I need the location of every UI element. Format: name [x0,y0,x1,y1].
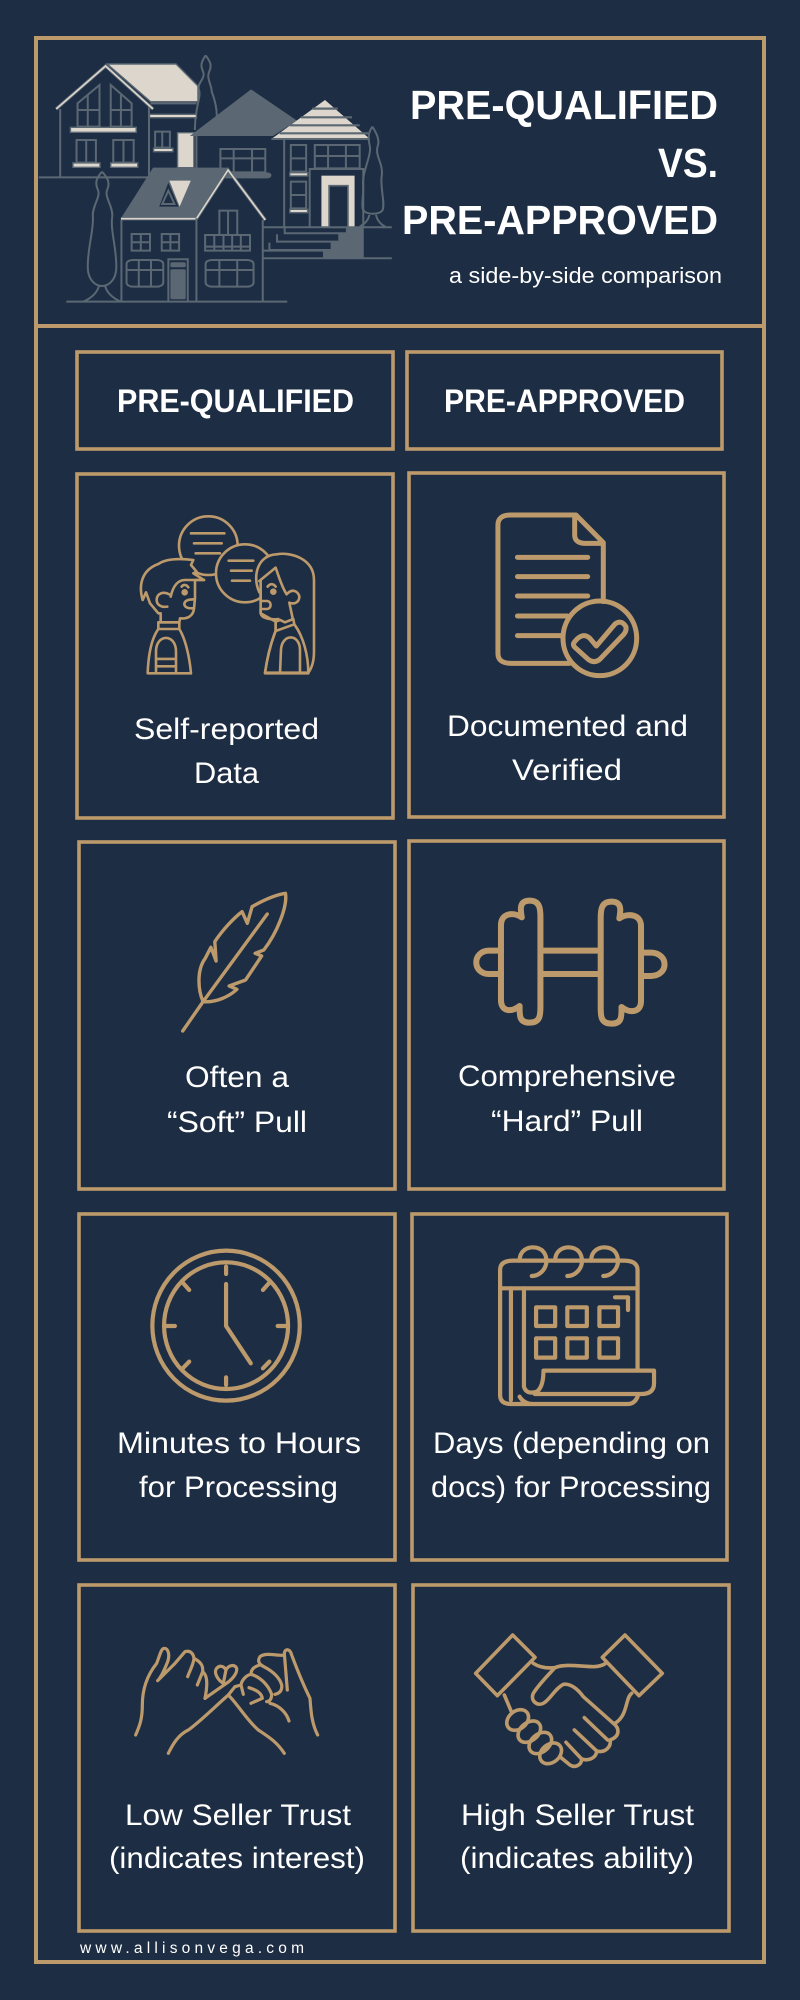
panel: minutes to hours: for Processing [139,1471,338,1504]
column header: pre-approved [407,352,722,449]
subtitle: a side-by-side comparison [449,263,722,288]
panel: days for processing: docs) for Processing [431,1471,711,1504]
panel: often a soft pull: “Soft” Pull [167,1106,307,1139]
panel: often a soft pull [79,842,395,1189]
panel: documented and verified: Verified [512,754,622,787]
panel: often a soft pull: Often a [185,1061,289,1094]
panel: self-reported data [77,474,393,818]
panel: minutes to hours [79,1214,395,1560]
column header: pre-qualified [77,352,393,449]
footer website: www.allisonvega.com [79,1940,304,1957]
panel: low seller trust: Low Seller Trust [125,1799,352,1832]
icon: pinky promise [136,1648,318,1753]
icon: two people talking [141,516,314,673]
icon: document with check [498,515,637,676]
title: VS. [658,140,718,186]
column header: pre-approved: PRE-APPROVED [444,383,685,419]
panel: low seller trust: (indicates interest) [109,1842,365,1875]
icon: handshake [476,1635,662,1768]
panel: high seller trust [413,1585,729,1931]
panel: minutes to hours: Minutes to Hours [117,1427,361,1460]
panel: self-reported data: Data [194,757,259,790]
icon: feather [183,893,286,1031]
column header: pre-qualified: PRE-QUALIFIED [117,383,354,419]
panel: self-reported data: Self-reported [134,713,319,746]
title [402,82,718,243]
title: PRE-QUALIFIED [410,82,718,128]
panel: comprehensive hard pull [409,841,724,1189]
panel: days for processing [412,1214,727,1560]
panel: comprehensive hard pull: “Hard” Pull [491,1105,643,1138]
panel: high seller trust: High Seller Trust [461,1799,695,1832]
panel: days for processing: Days (depending on [433,1427,710,1460]
illustration: row of houses [39,55,392,302]
panel: low seller trust [79,1585,395,1931]
panel: comprehensive hard pull: Comprehensive [458,1060,676,1093]
icon: calendar [500,1247,654,1404]
icon: dumbbell [476,901,665,1024]
title: PRE-APPROVED [402,197,718,243]
panel: high seller trust: (indicates ability) [460,1842,694,1875]
panel: documented and verified [409,473,724,817]
panel: documented and verified: Documented and [447,710,688,743]
icon: clock [152,1251,300,1401]
